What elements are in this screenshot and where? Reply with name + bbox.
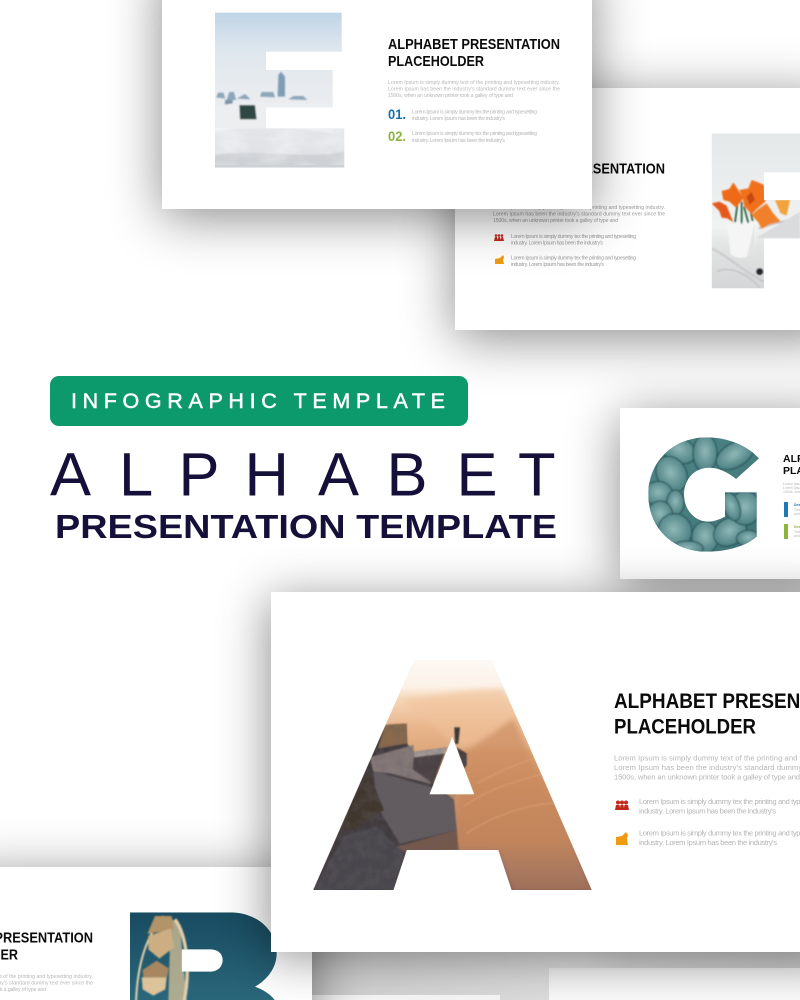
heading: slide E (388, 37, 560, 70)
row text 02: Lorem Ipsum is simply dummy tex the printing and typesetting (412, 131, 537, 137)
panel: slide B (0, 867, 312, 1000)
body text: slide E: 1500s, when an unknown printer took a galley of type and (388, 93, 513, 99)
lower background band (312, 952, 800, 1000)
number 01: 01. (388, 107, 406, 122)
body text: slide F: 1500s, when an unknown printer took a galley of type and (493, 218, 618, 224)
body text: slide F: Lorem Ipsum has been the industry's standard dummy text ever since the (493, 212, 665, 218)
row text: presenter (511, 256, 636, 268)
badge: infographic template (50, 376, 468, 426)
heading: slide B (0, 930, 93, 964)
body text: slide F (493, 205, 665, 224)
marker: blue bar (784, 502, 788, 517)
heading: slide A: PLACEHOLDER (614, 714, 756, 738)
row text 02: industry. Lorem Ipsum has been the industry's (412, 138, 505, 144)
letter F photo: orange flowers in white vase (710, 132, 800, 292)
body text: slide E (388, 80, 560, 99)
heading: slide A (614, 689, 800, 738)
body text: slide A: 1500s, when an unknown printer took a galley of type and (614, 772, 800, 782)
icon: presenter (616, 832, 628, 845)
panel: slide G (620, 408, 800, 579)
row text 02 (412, 131, 537, 144)
heading: slide G (783, 453, 800, 477)
panel: slide E (162, 0, 592, 209)
row text 01: Lorem Ipsum is simply dummy tex the printing and typesetting (412, 110, 537, 116)
body text: slide B (0, 974, 93, 993)
label: green row: and (794, 534, 800, 538)
row text: presenter: industry. Lorem Ipsum has been the industry's (639, 838, 777, 847)
row text 01: industry. Lorem Ipsum has been the industry's (412, 116, 505, 122)
row text: presenter (639, 828, 800, 847)
panel: lower slide right (549, 968, 800, 1000)
row text: team: industry. Lorem Ipsum has been the industry's (511, 240, 603, 246)
panel: slide A (271, 592, 800, 952)
letter B photo: ferris wheel (127, 910, 283, 1000)
label: blue row (794, 503, 800, 516)
body text: slide E: Lorem Ipsum has been the industry's standard dummy text ever since the (388, 86, 560, 92)
letter A photo: hiker on cliff at sunset (310, 658, 597, 893)
heading: slide F: ALPHABET PRESENTATION (493, 162, 665, 178)
icon: team (615, 800, 629, 810)
title: alphabet: ALPHABET (50, 440, 556, 510)
row text: presenter: industry. Lorem Ipsum has been the industry's (511, 262, 604, 268)
row text: team: Lorem Ipsum is simply dummy tex the printing and typesetting (511, 234, 636, 240)
heading: slide E: PLACEHOLDER (388, 54, 484, 70)
body text: slide F: Lorem Ipsum is simply dummy text of the printing and typesetting industry. (493, 205, 665, 211)
icon: presenter (495, 255, 504, 264)
row text 01 (412, 110, 537, 122)
letter G photo: succulent leaves (648, 437, 759, 552)
row text: team (511, 234, 636, 246)
body text: slide E: Lorem Ipsum is simply dummy text of the printing and typesetting industry. (388, 80, 560, 86)
panel: slide F (455, 88, 800, 330)
badge: infographic template: INFOGRAPHIC TEMPLATE (71, 389, 445, 413)
row text: presenter: Lorem Ipsum is simply dummy tex the printing and typesetting (511, 256, 636, 262)
marker: green bar (784, 524, 788, 539)
body text: slide A (614, 754, 800, 782)
row text: team (639, 797, 800, 816)
icon: team (494, 234, 504, 241)
subtitle: presentation template: PRESENTATION TEMPLATE (55, 508, 557, 545)
number 02: 02. (388, 129, 406, 144)
label: green row (794, 525, 800, 538)
letter E photo: city above clouds (213, 10, 347, 170)
row text: team: industry. Lorem Ipsum has been the industry's (639, 806, 776, 816)
body text: slide G (783, 482, 800, 494)
panel: lower slide left (312, 995, 500, 1000)
label: blue row: and (794, 512, 800, 516)
heading: slide E: ALPHABET PRESENTATION (388, 37, 560, 53)
